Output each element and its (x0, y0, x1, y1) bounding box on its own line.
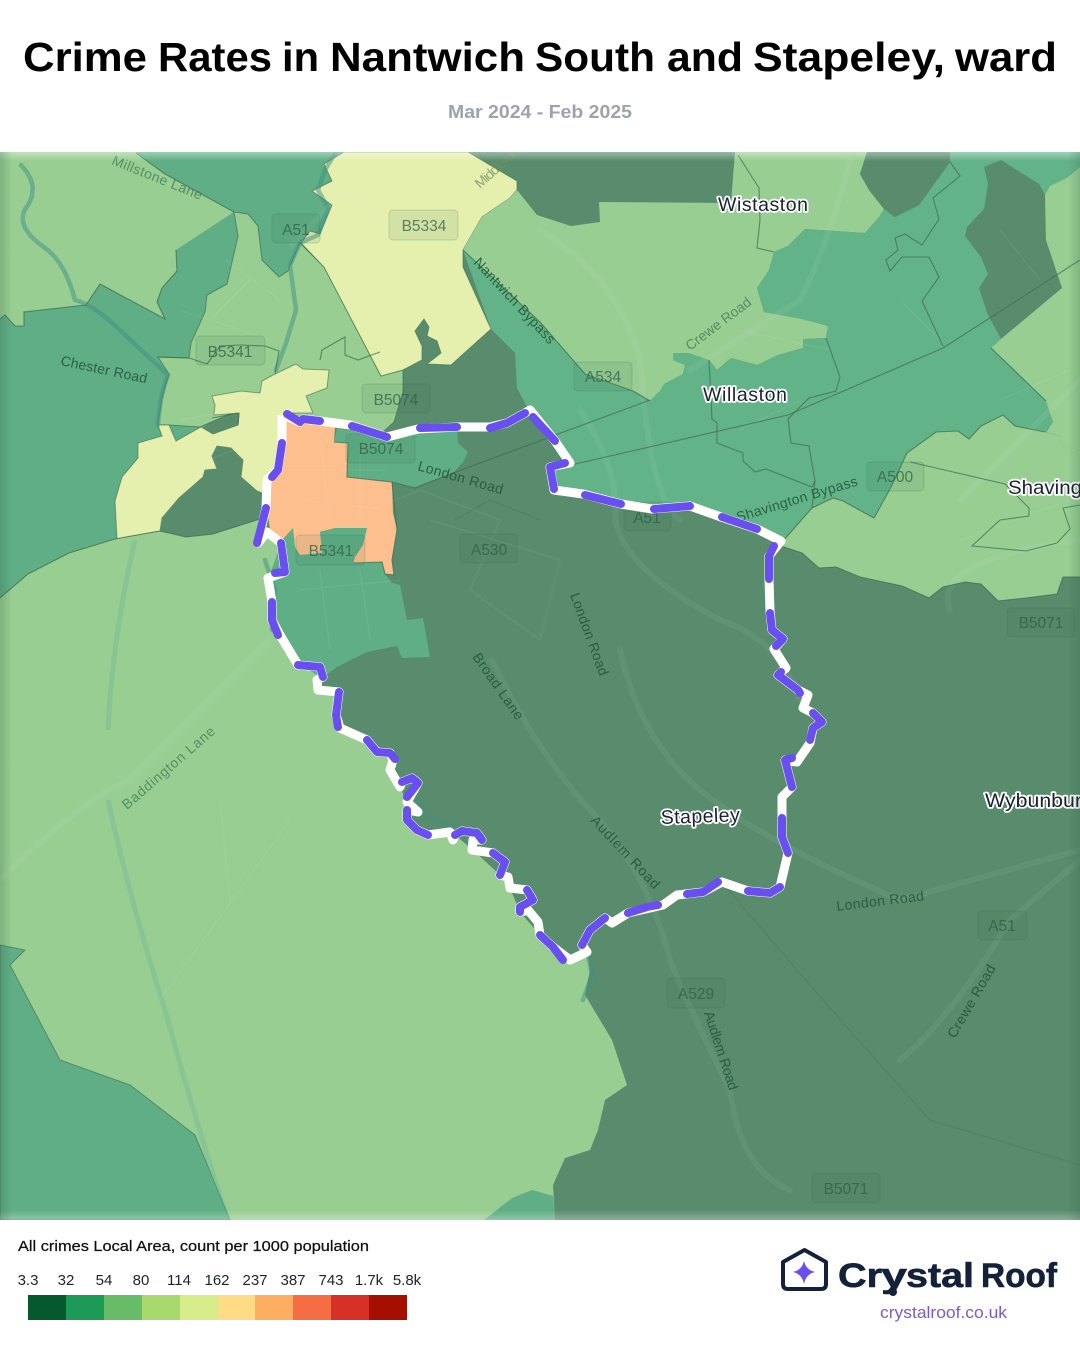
shield: B5071 east: B5071 (1019, 615, 1063, 632)
region: central light green (158, 212, 403, 432)
shield: A500 (867, 462, 924, 491)
region: north-east light green (463, 152, 884, 401)
title: Stapeley, (753, 34, 945, 80)
shield: B5341 north: B5341 (208, 344, 252, 361)
legend values: 32 (58, 1272, 74, 1289)
legend values: 54 (96, 1272, 112, 1289)
label: Middlewich Road clipped: Middlewich (471, 139, 527, 191)
label: Nantwich Bypass: Nantwich Bypass (471, 254, 559, 347)
legend values: 387 (280, 1272, 306, 1289)
shield: B5074 north (362, 384, 430, 413)
roads (180, 203, 1074, 1193)
region: north-east darkest patch (965, 160, 1062, 339)
title: South (535, 34, 655, 80)
region: bottom mid green blob (484, 1190, 555, 1220)
shield: A534 (574, 362, 632, 391)
shield: A51 north (272, 214, 320, 243)
road labels (59, 139, 999, 1092)
minor boundaries (0, 152, 1080, 602)
place: Wybunbury clipped: Wybunbur (985, 790, 1080, 812)
ward boundary white line (258, 410, 822, 960)
legend values: 5.8k (393, 1272, 422, 1289)
title: ward (954, 34, 1057, 80)
shield: B5071 east (1007, 608, 1075, 637)
region: north yellow (301, 152, 517, 376)
region: ward north mid green (334, 427, 468, 488)
legend values: 114 (167, 1272, 191, 1289)
road shields (196, 210, 1075, 1203)
region: west mid green (0, 152, 344, 598)
logo wordmark: Roof (981, 1257, 1058, 1295)
shield: A534: A534 (585, 369, 621, 386)
legend (18, 1238, 422, 1320)
shield: B5341 north (196, 336, 265, 365)
shield: A530 (460, 534, 517, 563)
label: London Road vertical: London Road (567, 591, 612, 678)
title: and (667, 34, 743, 80)
place: Stapeley: Stapeley (660, 804, 740, 829)
legend values (18, 1272, 422, 1289)
title: Crime (23, 34, 147, 80)
shield: B5071 south: B5071 (824, 1181, 868, 1198)
place labels (660, 194, 1080, 829)
region: south-east light green band (781, 415, 1080, 601)
map base: darkest green areas (0, 152, 1080, 1220)
label: Chester Road: Chester Road (59, 352, 149, 386)
legend title: All crimes Local Area, count per 1000 population (18, 1238, 369, 1255)
shield: A51 south-east (978, 911, 1027, 940)
shield: B5071 south (812, 1173, 880, 1203)
label: London Road east: London Road (835, 887, 925, 914)
shield: B5074 ward: B5074 (359, 441, 404, 458)
map edge fade (0, 152, 1080, 1220)
label: Baddington Lane: Baddington Lane (118, 723, 218, 812)
shield: A530: A530 (471, 542, 507, 559)
legend colour bar (28, 1295, 407, 1320)
place: Wistaston: Wistaston (718, 194, 808, 216)
shield: B5334 (389, 210, 458, 240)
shield: B5074 ward (346, 434, 415, 463)
place: Shavington clipped: Shaving (1008, 477, 1080, 499)
region: highest crime orange area (266, 420, 397, 575)
shield: A51 ward: A51 (633, 510, 661, 527)
shield: B5341 ward: B5341 (309, 543, 353, 560)
region: dark enclave (160, 446, 262, 530)
shield: A500: A500 (877, 469, 913, 486)
region: east mid green (463, 152, 1080, 541)
legend values: 3.3 (18, 1272, 38, 1289)
shield: A529 (667, 978, 725, 1008)
rivers (21, 152, 592, 1220)
label: Crewe Road north: Crewe Road (682, 294, 754, 353)
region: north-west light green (0, 152, 234, 326)
title: Rates (158, 34, 272, 80)
legend values: 162 (204, 1272, 230, 1289)
shield: A51 ward (624, 502, 671, 531)
label: Audlem Road ward: Audlem Road (588, 812, 664, 892)
place: Willaston: Willaston (703, 384, 787, 406)
title: Nantwich (330, 34, 525, 80)
label: Millstone Lane: Millstone Lane (110, 152, 205, 203)
region: town centre yellow (115, 364, 329, 539)
title: in (282, 34, 319, 80)
logo wordmark: y (881, 1257, 907, 1295)
region: ward south-west mid green (268, 528, 430, 678)
label: Audlem Road south: Audlem Road (701, 1009, 742, 1092)
shield: A51 north: A51 (282, 222, 310, 239)
region: south-west corner mid green (0, 945, 230, 1220)
logo wordmark: Cr (838, 1257, 882, 1295)
website link: crystalroof.co.uk (880, 1304, 1008, 1322)
subtitle: date range: Mar 2024 - Feb 2025 (448, 101, 632, 122)
legend values: 80 (133, 1272, 149, 1289)
label: Shavington Bypass: Shavington Bypass (734, 473, 859, 525)
icon: house with star (783, 1250, 826, 1289)
logo: Crystal Roof (783, 1250, 1058, 1322)
shield: A51 south-east: A51 (988, 918, 1016, 935)
legend values: 1.7k (355, 1272, 384, 1289)
label: London Road ward: London Road (416, 458, 505, 497)
shield: B5334: B5334 (402, 218, 447, 235)
label: Crewe Road south: Crewe Road (944, 961, 999, 1040)
legend values: 237 (242, 1272, 268, 1289)
region: south-west large light green (0, 518, 627, 1220)
ward boundary purple dashes (257, 413, 822, 960)
label: Broad Lane: Broad Lane (470, 650, 528, 723)
region: north-east dark patch (860, 152, 950, 217)
shield: B5341 ward (296, 535, 365, 565)
logo key detail (889, 1288, 897, 1296)
logo wordmark: stal (906, 1257, 974, 1295)
legend values: 743 (318, 1272, 344, 1289)
shield: B5074 north: B5074 (374, 392, 419, 409)
region: far-east light green (991, 167, 1080, 450)
shield: A529: A529 (678, 986, 714, 1003)
